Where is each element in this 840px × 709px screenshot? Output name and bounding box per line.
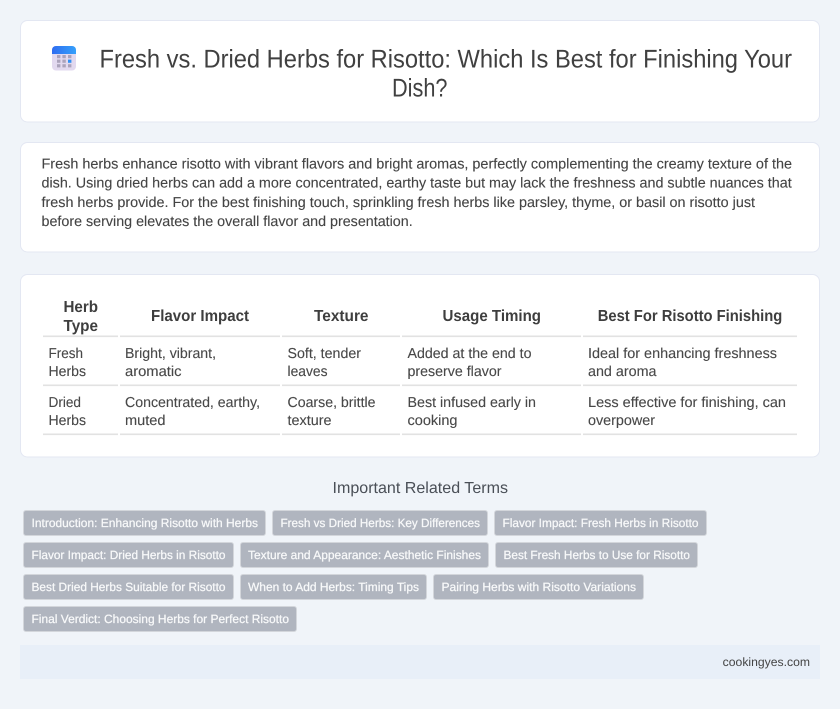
table row: fresh herbs: Fresh (48, 346, 83, 362)
table row: dried herbs: Coarse, brittle (288, 395, 376, 411)
table header row: Texture (314, 308, 369, 325)
table row: dried herbs: Concentrated, earthy, (125, 395, 260, 411)
table rules (43, 336, 797, 435)
intro paragraph: dish. Using dried herbs can add a more concentrated, earthy taste but may lack the freshness and subtle nuances that (42, 176, 792, 192)
table header row: Usage Timing (442, 308, 541, 325)
table row: fresh herbs: Soft, tender (288, 346, 361, 362)
tag: Flavor Impact: Dried Herbs in Risotto (32, 548, 226, 562)
table row: dried herbs: Herbs (48, 413, 86, 429)
title: Dish? (392, 74, 448, 102)
table row: fresh herbs: aromatic (125, 364, 182, 380)
table header row: Flavor Impact (151, 308, 250, 325)
tag: Flavor Impact: Fresh Herbs in Risotto (502, 516, 699, 530)
intro paragraph: before serving elevates the overall flavor and presentation. (42, 214, 413, 230)
header panel (20, 20, 820, 122)
tag (240, 542, 488, 568)
tag list (24, 510, 706, 632)
intro paragraph: Fresh herbs enhance risotto with vibrant flavors and bright aromas, perfectly complementing the creamy texture of the (42, 156, 792, 172)
tag (434, 574, 644, 600)
table header row: Best For Risotto Finishing (598, 308, 782, 325)
title (100, 46, 792, 102)
tag: Final Verdict: Choosing Herbs for Perfect Risotto (32, 612, 289, 626)
table row: fresh herbs: Ideal for enhancing freshness (588, 346, 777, 362)
table row: dried herbs: Best infused early in (408, 395, 536, 411)
heading: important related terms: Important Related Terms (332, 480, 508, 497)
table header row (64, 299, 782, 335)
table row: dried herbs: Less effective for finishing, can (588, 395, 786, 411)
table row: dried herbs: muted (125, 413, 166, 429)
tag (24, 510, 266, 536)
tag (496, 542, 698, 568)
tag: Best Fresh Herbs to Use for Risotto (504, 548, 690, 562)
tag: Fresh vs Dried Herbs: Key Differences (280, 516, 480, 530)
panel: introduction (20, 142, 820, 252)
intro paragraph (42, 156, 792, 230)
footer bar (20, 645, 820, 679)
tag (24, 574, 234, 600)
tag: Texture and Appearance: Aesthetic Finishes (248, 548, 481, 562)
tag (272, 510, 488, 536)
table row: fresh herbs: preserve flavor (408, 364, 502, 380)
table row: fresh herbs: Herbs (48, 364, 86, 380)
tag (24, 606, 296, 632)
table row: dried herbs: Dried (48, 395, 81, 411)
table header row: Herb (64, 299, 98, 316)
table row: fresh herbs: Added at the end to (408, 346, 532, 362)
tag: When to Add Herbs: Timing Tips (248, 580, 419, 594)
table row: dried herbs (48, 395, 786, 429)
tag (240, 574, 426, 600)
table header row: Type (64, 318, 98, 335)
table row: dried herbs: cooking (408, 413, 458, 429)
table row: fresh herbs (48, 346, 777, 380)
tag: Introduction: Enhancing Risotto with Herbs (32, 516, 258, 530)
tag (24, 542, 234, 568)
table row: fresh herbs: Bright, vibrant, (125, 346, 216, 362)
table row: dried herbs: overpower (588, 413, 655, 429)
tag: Pairing Herbs with Risotto Variations (442, 580, 636, 594)
title: Fresh vs. Dried Herbs for Risotto: Which Is Best for Finishing Your (100, 46, 792, 74)
tag (494, 510, 706, 536)
table row: fresh herbs: and aroma (588, 364, 656, 380)
table row: fresh herbs: leaves (288, 364, 328, 380)
intro paragraph: fresh herbs provide. For the best finishing touch, sprinkling fresh herbs like parsley, thyme, or basil on risotto just (42, 195, 755, 211)
icon: calendar (52, 46, 76, 70)
table row: dried herbs: texture (288, 413, 332, 429)
footer site name: cookingyes.com (723, 655, 810, 669)
panel: comparison table (20, 274, 820, 457)
tag: Best Dried Herbs Suitable for Risotto (32, 580, 226, 594)
